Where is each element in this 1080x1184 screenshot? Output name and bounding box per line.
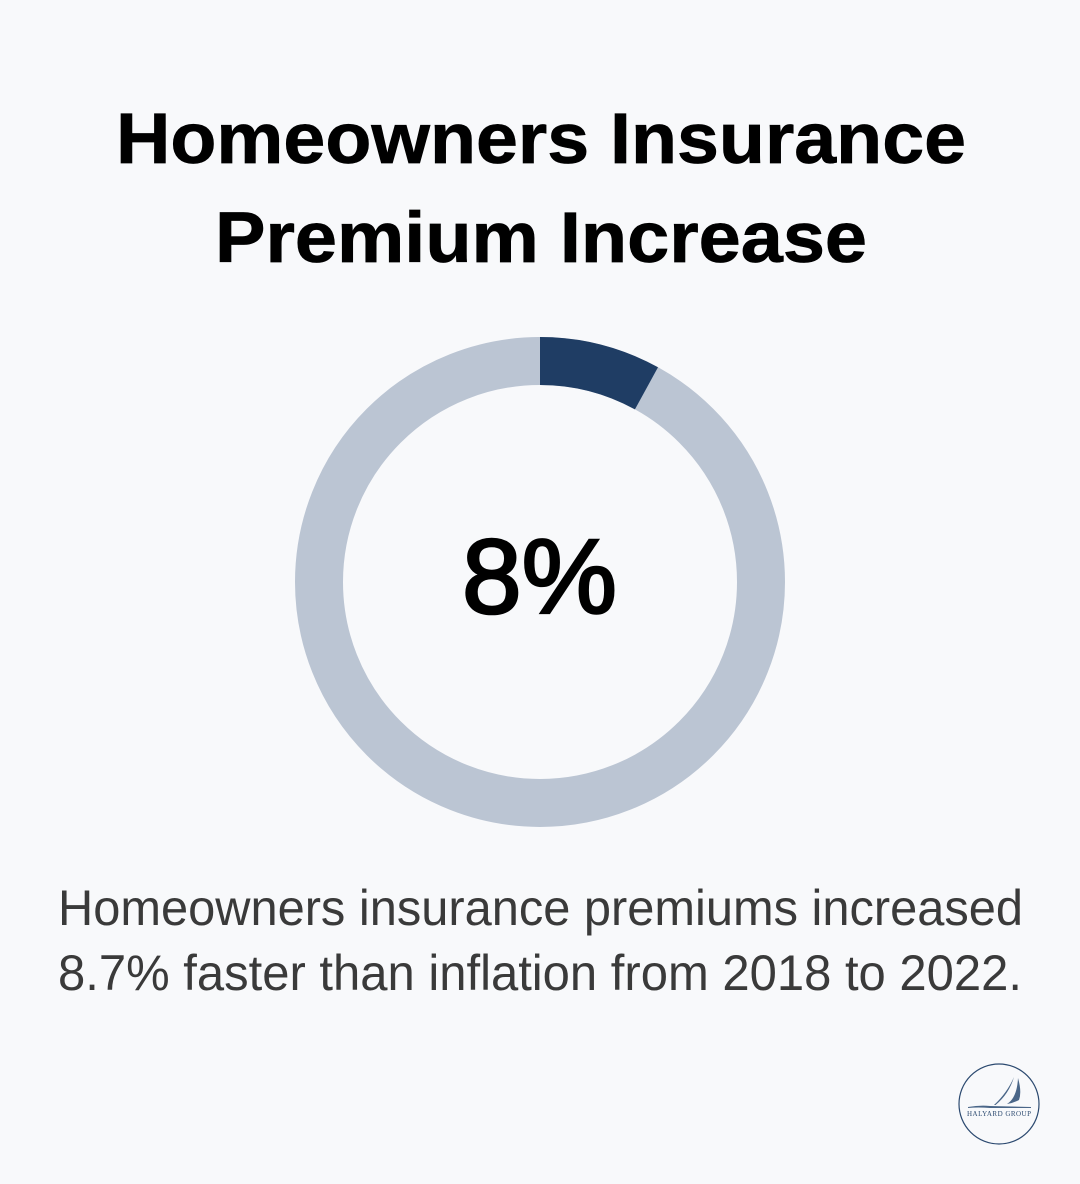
description text: 8.7% faster than inflation from 2018 to 2022. bbox=[58, 945, 1022, 1001]
title bbox=[116, 100, 966, 278]
title: Homeowners Insurance bbox=[116, 100, 966, 179]
title: Premium Increase bbox=[215, 199, 867, 278]
logo: Halyard Group bbox=[959, 1064, 1039, 1144]
center value: 8% bbox=[462, 518, 617, 636]
logo wordmark: HALYARD GROUP bbox=[967, 1110, 1031, 1118]
description text: Homeowners insurance premiums increased bbox=[58, 880, 1023, 936]
donut chart: 8% bbox=[319, 337, 761, 803]
description text bbox=[58, 880, 1023, 1001]
icon: sailboat bbox=[968, 1077, 1031, 1108]
